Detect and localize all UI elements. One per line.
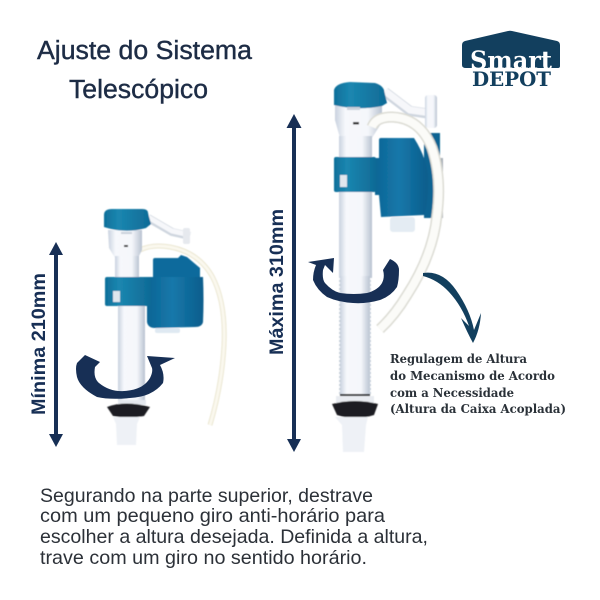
base — [118, 400, 146, 405]
instructions text: Segurando na parte superior, destrave — [40, 485, 373, 507]
small float valve — [104, 209, 224, 445]
tube — [115, 256, 139, 280]
callout text: Regulagem de Altura — [390, 352, 527, 366]
title: Ajuste do Sistema — [37, 37, 253, 65]
title — [37, 37, 253, 104]
upper body — [108, 230, 142, 258]
arm — [385, 92, 431, 114]
callout text: (Altura da Caixa Acoplada) — [390, 402, 566, 416]
callout text — [390, 352, 566, 416]
label: maximum height: Máxima 310mm — [267, 209, 288, 355]
logo: Smart Depot — [462, 31, 560, 91]
band — [105, 277, 151, 306]
callout text: com a Necessidade — [390, 386, 514, 400]
cap — [334, 82, 387, 108]
back piece — [424, 133, 440, 218]
label: minimum height: Mínima 210mm — [29, 273, 50, 415]
curved callout arrow — [423, 273, 481, 343]
arm — [148, 218, 190, 236]
callout text: do Mecanismo de Acordo — [390, 369, 555, 383]
base — [340, 394, 370, 396]
float — [153, 255, 200, 278]
large float valve — [332, 82, 443, 452]
corrugated tube — [340, 276, 370, 396]
hose — [140, 246, 224, 425]
logo: Smart Depot: DEPOT — [472, 68, 551, 91]
instructions text — [40, 485, 428, 569]
arrow: maximum height — [286, 114, 302, 452]
arrow: minimum height — [49, 242, 63, 447]
float — [375, 138, 428, 217]
title: Telescópico — [69, 76, 208, 104]
rotation arrow: small valve — [76, 355, 175, 399]
instructions text: escolher a altura desejada. Definida a altura, — [40, 526, 428, 548]
hose — [372, 117, 439, 329]
band — [334, 157, 376, 192]
instructions text: com um pequeno giro anti-horário para — [40, 505, 385, 527]
rotation arrow: large valve — [308, 258, 399, 303]
upper body — [335, 105, 382, 138]
cap — [104, 209, 151, 231]
logo: Smart Depot: Smart — [470, 46, 552, 75]
tube upper — [339, 136, 372, 160]
instructions text: trave com um giro no sentido horário. — [40, 547, 367, 569]
